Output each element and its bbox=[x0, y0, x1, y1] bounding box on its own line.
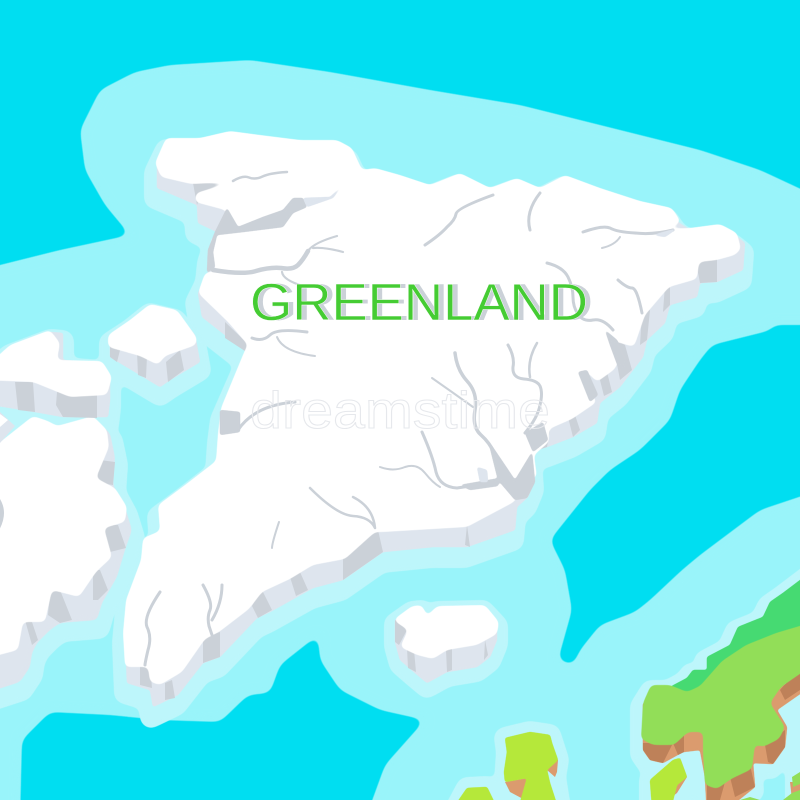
island: small ice floe bbox=[108, 304, 200, 387]
cracks and glaciers bbox=[145, 172, 673, 665]
ice cliffs bbox=[125, 133, 745, 707]
ice sheet top bbox=[123, 131, 741, 685]
island: left large ice mass bbox=[0, 416, 132, 695]
island: tiny fragment at left edge bbox=[0, 412, 15, 443]
icy halo: small islands bbox=[0, 314, 800, 800]
island: southern ice floe bbox=[393, 605, 499, 683]
region: Scandinavia bbox=[641, 565, 800, 800]
island: left upper ice mass bbox=[0, 330, 112, 418]
region: British islands bbox=[445, 732, 800, 800]
title shadow: GREENLAND bbox=[255, 274, 593, 332]
title: GREENLAND bbox=[250, 274, 588, 332]
icy halo: Greenland bbox=[123, 143, 743, 717]
glacier shaded blobs bbox=[207, 198, 628, 500]
watermark text: dreamstime bbox=[250, 382, 550, 440]
cliff shadows bbox=[140, 180, 717, 700]
island: Greenland bbox=[123, 131, 745, 707]
